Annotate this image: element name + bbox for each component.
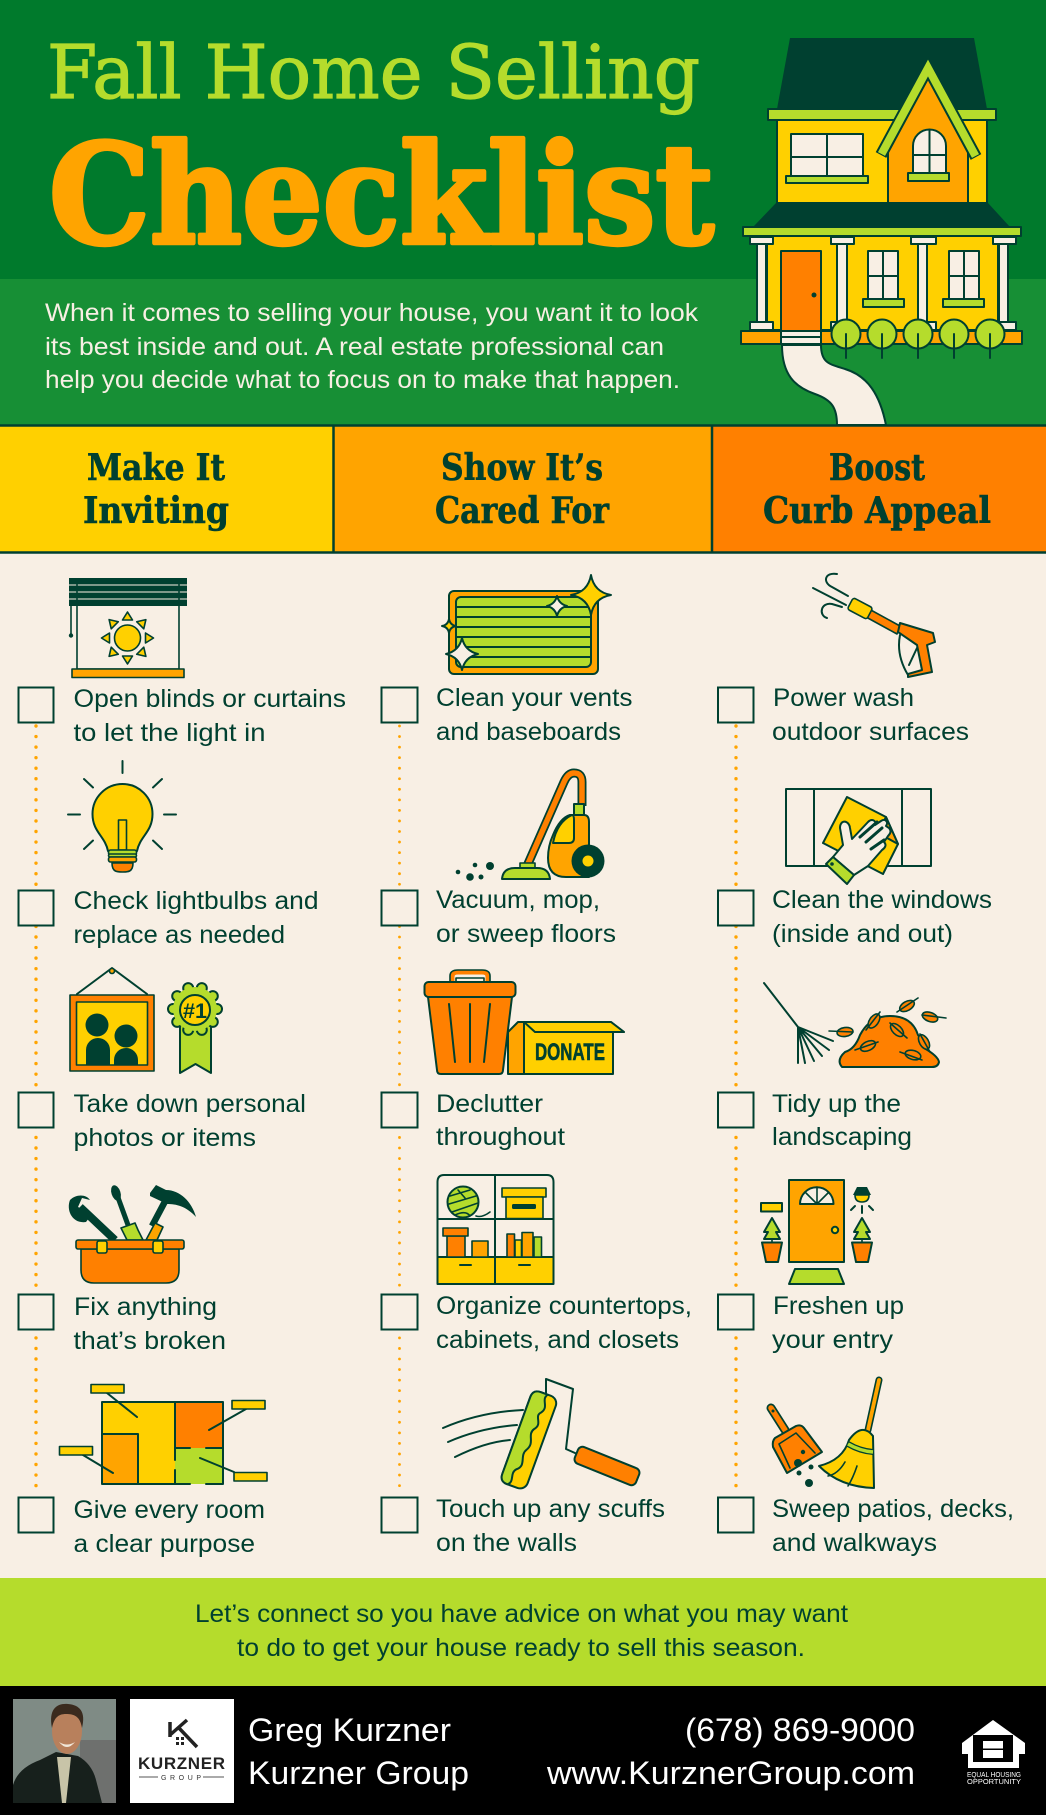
heading: Make It Inviting [83,447,229,532]
heading: Make It Inviting: Inviting [83,490,229,532]
item text: a clear purpose [74,1530,255,1558]
heading: Make It Inviting: Make It [87,447,225,489]
heading: Show It's Cared For: Cared For [435,490,610,532]
logo: equal housing opportunity: OPPORTUNITY [967,1779,1021,1786]
item text: that’s broken [74,1327,226,1355]
checkbox [18,1498,54,1532]
logo: Kurzner Group [130,1699,234,1803]
panel: header [0,0,1046,426]
icon: toolbox with tools [69,1184,196,1283]
checkbox [718,1498,754,1532]
item text: Organize countertops, [436,1292,692,1320]
icon: house [741,38,1022,425]
item text: to let the light in [74,719,266,747]
checkbox [382,1092,418,1128]
title: Fall Home Selling: Fall Home Selling [47,30,700,116]
text: agent name: Kurzner Group [248,1755,469,1791]
checkbox [382,890,418,926]
item text: and walkways [772,1529,937,1557]
item text [436,886,616,948]
icon: paint roller [443,1379,641,1491]
checkbox [18,1092,54,1128]
text: agent name: Greg Kurzner [248,1712,451,1748]
item text: (inside and out) [772,920,953,948]
item text: Check lightbulbs and [74,887,318,915]
item text [436,1495,665,1557]
heading: Boost Curb Appeal [763,447,991,532]
icon: floor plan [60,1384,267,1484]
item text: cabinets, and closets [436,1326,679,1354]
icon: trash can and donate box [424,970,624,1074]
item text [74,1293,226,1355]
item text: Clean your vents [436,684,632,712]
checkbox [718,890,754,926]
text: call to action: Let’s connect so you have advice on what you may want [195,1600,848,1628]
item text: landscaping [772,1123,912,1151]
icon: framed photo and ribbon [70,968,222,1073]
item text [436,1292,692,1354]
logo: Kurzner Group: KURZNER [138,1754,225,1773]
item text [436,684,632,746]
item text: photos or items [74,1124,256,1152]
checkbox [18,890,54,926]
icon: organized shelves [438,1175,554,1284]
checkbox [382,1498,418,1532]
item text: outdoor surfaces [772,718,969,746]
panel: Make It Inviting checklist [18,578,346,1558]
item text [772,1495,1014,1557]
panel: column headers [0,425,1046,553]
item text: Power wash [773,684,914,712]
logo: Kurzner Group: GROUP [161,1775,201,1782]
icon: broom and dustpan [771,1380,879,1488]
panel: footer [0,1686,1046,1815]
item text: or sweep floors [436,920,616,948]
text: agent name [248,1712,469,1791]
item text [74,1496,265,1558]
heading: Show It's Cared For [435,447,610,532]
text: contact details: www.KurznerGroup.com [546,1755,915,1791]
text: call to action [195,1600,848,1662]
item text [74,887,318,949]
intro text: its best inside and out. A real estate professional can [45,333,664,361]
item text [74,1090,306,1152]
icon: wiping a window [786,789,931,884]
intro text: help you decide what to focus on to make that happen. [45,366,680,394]
item text: replace as needed [74,921,285,949]
checkbox [718,1092,754,1128]
heading: Boost Curb Appeal: Curb Appeal [763,490,991,532]
icon: lightbulb [68,761,176,872]
item text: on the walls [436,1529,577,1557]
intro text: When it comes to selling your house, you want it to look [45,299,699,327]
item text: Vacuum, mop, [436,886,600,914]
logo: equal housing opportunity: EQUAL HOUSING [967,1772,1021,1779]
item text [772,1090,912,1151]
checkbox [718,1294,754,1330]
checkbox [718,688,754,722]
item text [772,886,992,948]
item text: Give every room [74,1496,265,1524]
panel: Boost Curb Appeal checklist [718,574,1014,1557]
checkbox [382,688,418,722]
intro text [45,299,699,394]
item text: Clean the windows [772,886,992,914]
item text [74,685,346,747]
icon: front door entry [761,1180,873,1284]
icon: power washer [813,574,935,677]
item text: Open blinds or curtains [74,685,346,713]
item text [772,684,969,746]
panel: call to action [0,1578,1046,1686]
icon: rake and leaf pile [764,983,946,1067]
logo: equal housing opportunity [962,1720,1025,1786]
checkbox [18,688,54,722]
item text: Fix anything [74,1293,217,1321]
icon: framed photo and ribbon: #1 [183,1000,207,1023]
item text: Tidy up the [772,1090,901,1118]
checkbox [18,1294,54,1330]
text: call to action: to do to get your house ready to sell this season. [237,1634,805,1662]
item text: Touch up any scuffs [436,1495,665,1523]
item text [436,1090,565,1151]
item text: your entry [772,1326,894,1354]
text: contact details [546,1712,915,1791]
item text: Sweep patios, decks, [772,1495,1014,1523]
item text: throughout [436,1123,565,1151]
heading: Show It's Cared For: Show It’s [441,447,603,489]
item text: and baseboards [436,718,621,746]
item text: Take down personal [74,1090,306,1118]
icon: vacuum [456,773,604,881]
checkbox [382,1294,418,1330]
title: Checklist: Checklist [49,113,714,276]
icon: blinds with sun [69,578,187,678]
icon: clean vent with sparkles [442,575,611,674]
heading: Boost Curb Appeal: Boost [829,447,925,489]
photo: agent portrait [13,1699,116,1803]
item text: Freshen up [773,1292,904,1320]
item text: Declutter [436,1090,543,1118]
icon: trash can and donate box: DONATE [535,1039,605,1066]
item text [772,1292,904,1354]
panel: Show It's Cared For checklist [382,575,692,1557]
text: contact details: (678) 869-9000 [685,1712,915,1748]
